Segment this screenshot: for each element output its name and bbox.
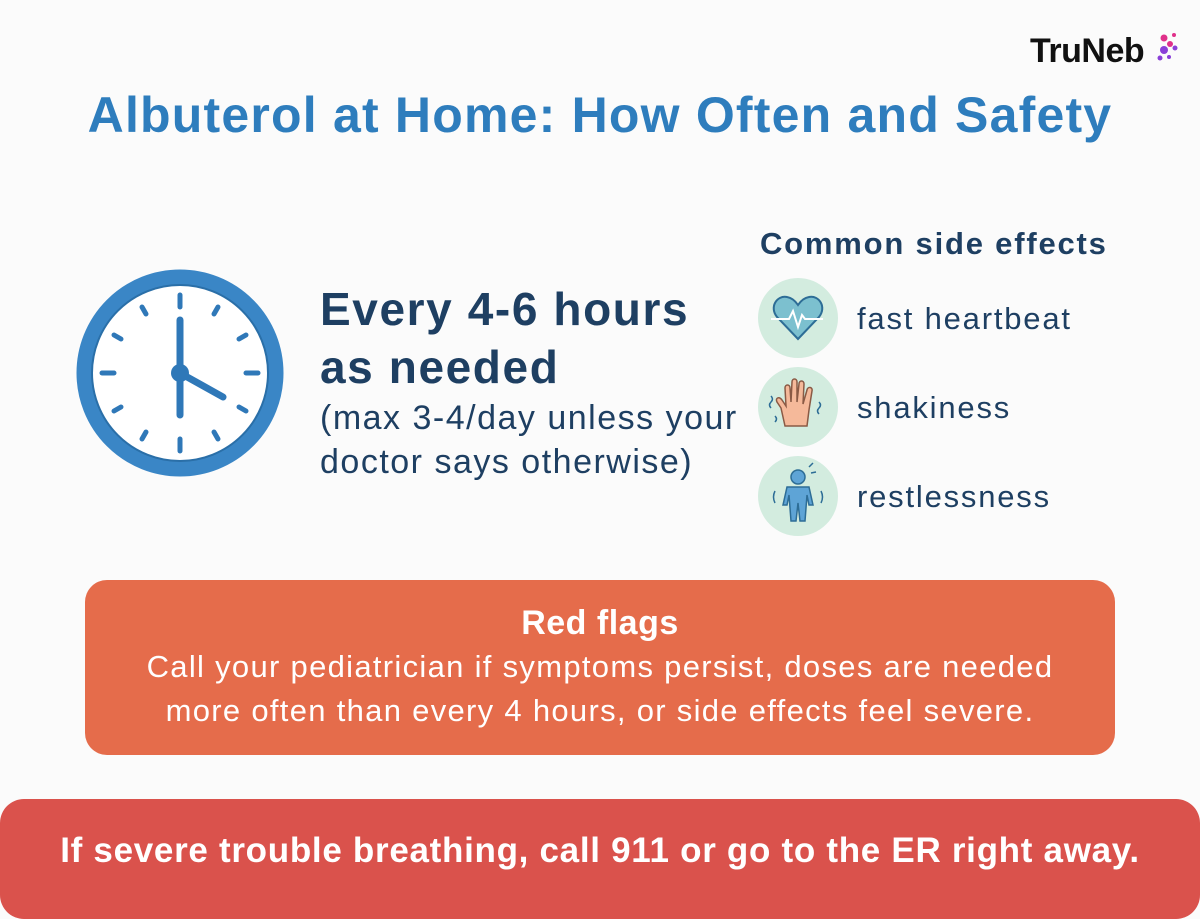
panel: red flags <box>85 580 1115 755</box>
dosing text: (max 3-4/day unless your <box>320 399 738 437</box>
side effects list: restlessness <box>857 479 1051 514</box>
dosing text: as needed <box>320 341 559 393</box>
title: Albuterol at Home: How Often and Safety <box>88 87 1112 143</box>
side effects heading: Common side effects <box>760 226 1108 261</box>
icon: heart <box>758 278 838 358</box>
dosing text <box>320 283 738 481</box>
side effects list <box>758 278 1072 536</box>
red flags text: Call your pediatrician if symptoms persist, doses are needed <box>147 649 1053 684</box>
icon: clock <box>76 270 284 476</box>
icon: shaking hand <box>758 367 838 447</box>
side effects list: shakiness <box>857 390 1011 425</box>
emergency banner <box>0 799 1200 919</box>
icon: restless person <box>758 456 838 536</box>
red flags text <box>147 649 1053 728</box>
red flags heading: Red flags <box>521 604 679 642</box>
side effects list: fast heartbeat <box>857 301 1072 336</box>
red flags text: more often than every 4 hours, or side effects feel severe. <box>166 693 1034 728</box>
logo: TruNeb <box>1030 32 1144 70</box>
dosing text: Every 4-6 hours <box>320 283 689 335</box>
dosing text: doctor says otherwise) <box>320 443 693 481</box>
emergency banner: If severe trouble breathing, call 911 or go to the ER right away. <box>60 831 1140 870</box>
